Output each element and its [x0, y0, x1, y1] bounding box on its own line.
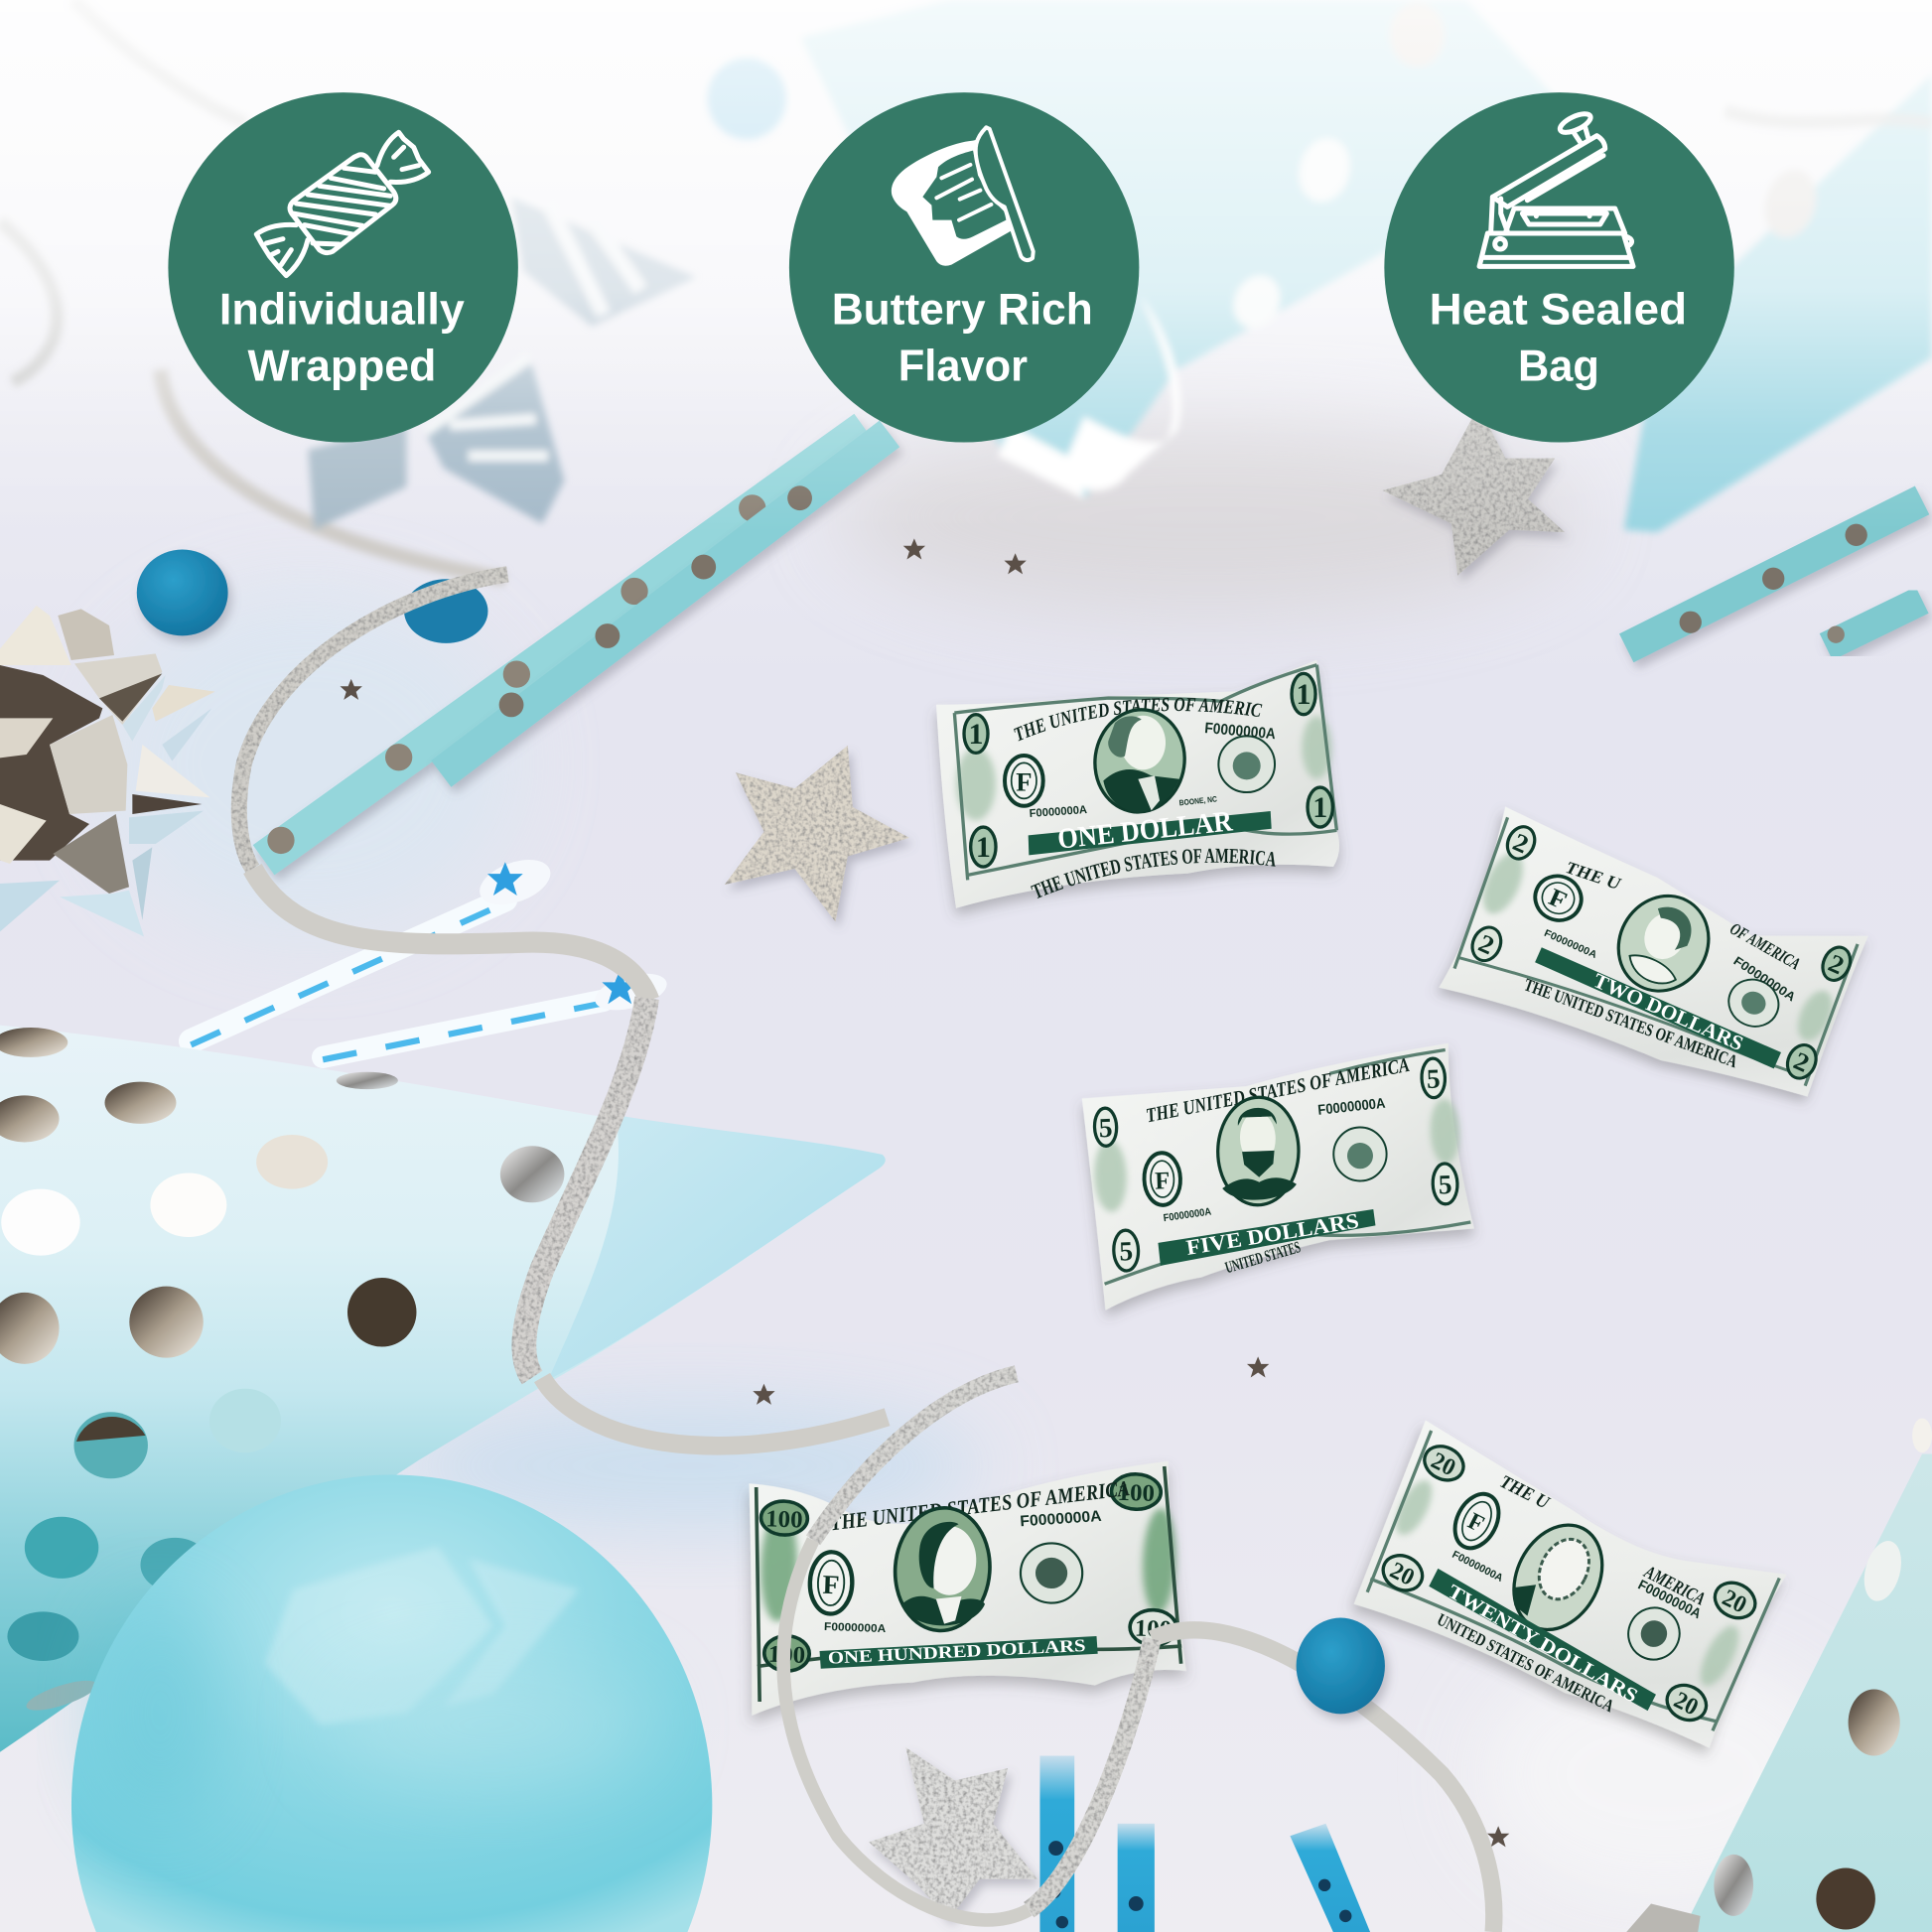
candy: one hundred dollars: 100: [1134, 1615, 1173, 1643]
candy: one hundred dollars: F0000000A: [1020, 1508, 1103, 1530]
candy: one hundred dollars: 100: [1117, 1479, 1155, 1507]
pompom, bottom: [1297, 1618, 1385, 1714]
badge: individually wrapped: [168, 92, 518, 443]
candy: five dollars: UNITED STATES: [1223, 1237, 1303, 1277]
candy: two dollars: [1427, 779, 1877, 1143]
candy: two dollars: F: [1545, 883, 1571, 914]
candy: twenty dollars: THE U: [1496, 1471, 1554, 1514]
beige glitter star: [725, 746, 909, 921]
candy: one dollar: 1: [1312, 791, 1327, 824]
candy: one hundred dollars: 100: [765, 1506, 803, 1533]
candy: one dollar: F: [1016, 766, 1033, 796]
candy: two dollars: F0000000A: [1731, 953, 1799, 1005]
icon: wrapped candy: [256, 132, 429, 276]
candy: twenty dollars: 20: [1427, 1448, 1459, 1481]
paper straws, right: [1626, 500, 1922, 648]
candy: two dollars: F0000000A: [1542, 927, 1598, 961]
balloon: [71, 1474, 712, 1932]
candy: one dollar: 1: [1297, 678, 1311, 711]
candy: two dollars: THE UNITED STATES OF AMERICA: [1521, 975, 1740, 1072]
badge: buttery rich flavor: [789, 92, 1139, 443]
candy: one dollar: 1: [976, 831, 991, 864]
glitter star, bottom: [869, 1747, 1037, 1920]
candles, bottom: [1039, 1756, 1370, 1932]
badge: heat sealed bag: Heat Sealed: [1430, 285, 1687, 334]
party cone with foil dots, left: [0, 1026, 886, 1752]
white fog over top of photo: [0, 0, 1932, 579]
candy: one hundred dollars: 100: [767, 1641, 806, 1669]
candy: one dollar: ONE DOLLAR: [1056, 805, 1235, 856]
badge: buttery rich flavor: Buttery Rich: [832, 285, 1093, 334]
badge: individually wrapped: Wrapped: [247, 342, 436, 390]
candy: one hundred dollars: [741, 1447, 1193, 1730]
candy: twenty dollars: UNITED STATES OF AMERICA: [1434, 1610, 1617, 1716]
candy: twenty dollars: 20: [1386, 1558, 1419, 1591]
haze ribbons, top: [0, 0, 1932, 382]
candy: twenty dollars: F0000000A: [1450, 1549, 1505, 1585]
party cone, top right: [1624, 73, 1932, 532]
candy: one dollar: [930, 661, 1345, 919]
candy: one dollar: F0000000A: [1204, 720, 1277, 743]
candy: five dollars: F0000000A: [1317, 1096, 1386, 1119]
party cup, top centre: [801, 0, 1589, 499]
candy: five dollars: 5: [1098, 1113, 1113, 1143]
silver gift bow, left: [0, 606, 215, 936]
candy: one dollar: THE UNITED STATES OF AMERICA: [1014, 697, 1263, 741]
badge: individually wrapped: Individually: [219, 285, 465, 334]
candy: twenty dollars: F0000000A: [1636, 1577, 1704, 1621]
candy: two dollars: THE U: [1564, 858, 1623, 894]
candy: one hundred dollars: THE UNITED STATES OF AMERICA: [829, 1475, 1131, 1535]
candy: five dollars: 5: [1426, 1063, 1441, 1094]
candy: one hundred dollars: ONE HUNDRED DOLLARS: [827, 1635, 1086, 1668]
candy: twenty dollars: AMERICA: [1640, 1562, 1709, 1610]
candy: one dollar: THE UNITED STATES OF AMERICA: [1031, 848, 1276, 898]
candy: twenty dollars: TWENTY DOLLARS: [1444, 1581, 1641, 1708]
candy: two dollars: 2: [1789, 1046, 1814, 1078]
candy: twenty dollars: [1336, 1397, 1795, 1777]
badge: buttery rich flavor: Flavor: [898, 342, 1028, 390]
paper straws, centre: [264, 429, 890, 860]
candy: five dollars: 5: [1438, 1170, 1452, 1200]
candy: one dollar: 1: [969, 718, 984, 751]
icon: bread and butter knife: [892, 127, 1034, 266]
candy: five dollars: F0000000A: [1163, 1206, 1212, 1224]
candy: one hundred dollars: F0000000A: [824, 1621, 886, 1635]
candy: two dollars: 2: [1509, 827, 1533, 859]
party cone, bottom right: [1626, 1418, 1932, 1932]
silver star, top right: [1382, 407, 1565, 576]
candy: one hundred dollars: F: [822, 1570, 840, 1599]
candy: twenty dollars: 20: [1718, 1585, 1750, 1619]
candy: two dollars: TWO DOLLARS: [1589, 969, 1746, 1055]
candy: five dollars: THE UNITED STATES OF AMERICA: [1144, 1054, 1412, 1127]
small dark stars: [341, 538, 1509, 1847]
foil dots: [0, 1028, 564, 1717]
candy: five dollars: F: [1155, 1168, 1171, 1195]
candy: five dollars: 5: [1119, 1236, 1134, 1267]
candy: two dollars: 2: [1824, 948, 1849, 980]
badge: heat sealed bag: Bag: [1518, 342, 1599, 390]
candy: five dollars: [1080, 1042, 1476, 1311]
pompoms, blue: [137, 550, 487, 643]
candy: one dollar: F0000000A: [1029, 804, 1087, 820]
candy: two dollars: 2: [1474, 928, 1498, 960]
candy: twenty dollars: 20: [1670, 1687, 1703, 1722]
candy: one dollar: BOONE, NC: [1178, 794, 1218, 807]
icon: heat sealer machine: [1479, 110, 1633, 266]
striped bow, top left: [160, 58, 786, 579]
candy: twenty dollars: F: [1463, 1508, 1488, 1538]
candy: five dollars: FIVE DOLLARS: [1184, 1208, 1360, 1260]
birthday candles: [191, 851, 671, 1059]
badge: heat sealed bag: [1384, 92, 1734, 443]
candy: two dollars: OF AMERICA: [1726, 919, 1804, 973]
curling ribbons: [239, 574, 1494, 1932]
